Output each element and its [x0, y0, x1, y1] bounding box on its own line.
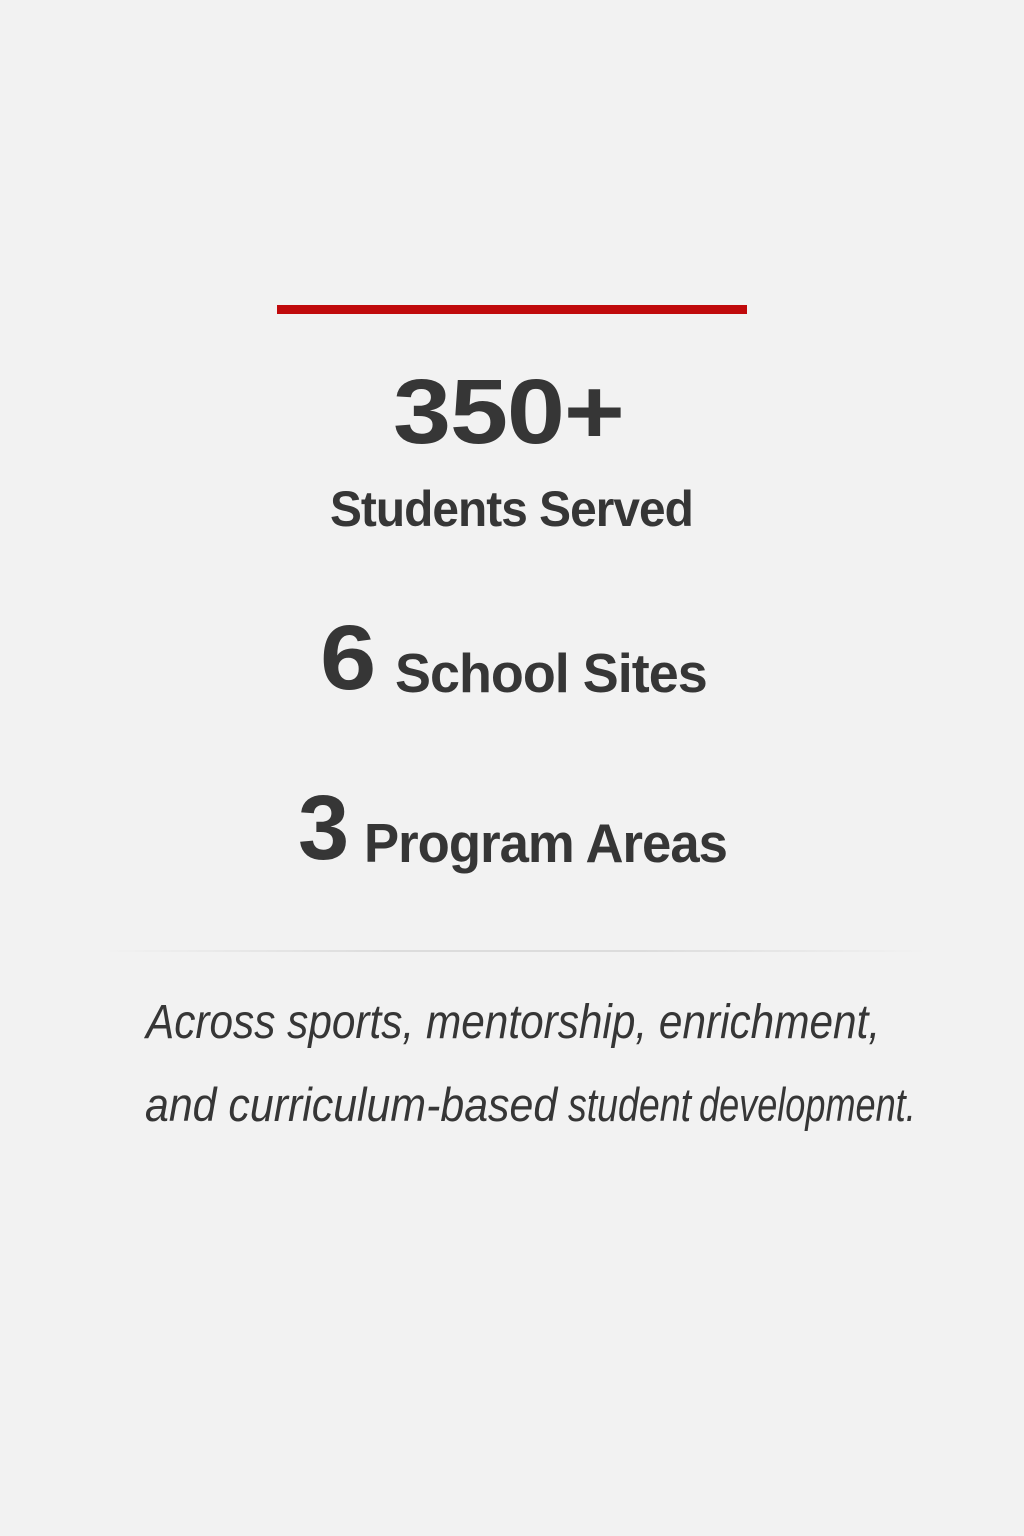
- description line 2: [145, 1078, 916, 1131]
- label: School Sites: School Sites: [395, 642, 707, 704]
- stat: 6 School Sites: [320, 607, 707, 709]
- number: 6: 6: [320, 607, 376, 709]
- stat: 350+: 350+: [393, 361, 624, 463]
- number: 3: 3: [298, 777, 349, 879]
- divider: [100, 950, 930, 952]
- description text: [144, 996, 916, 1131]
- description line 2: development.: [699, 1078, 916, 1131]
- red accent rule: [277, 305, 747, 314]
- description line 2: and curriculum-based: [145, 1078, 557, 1131]
- description line 2: student: [568, 1078, 691, 1131]
- label: Students Served: Students Served: [330, 481, 693, 537]
- stat: 3 Program Areas: [298, 777, 727, 879]
- description line 1: Across sports, mentorship, enrichment,: [146, 996, 880, 1049]
- label: Program Areas: Program Areas: [364, 812, 727, 874]
